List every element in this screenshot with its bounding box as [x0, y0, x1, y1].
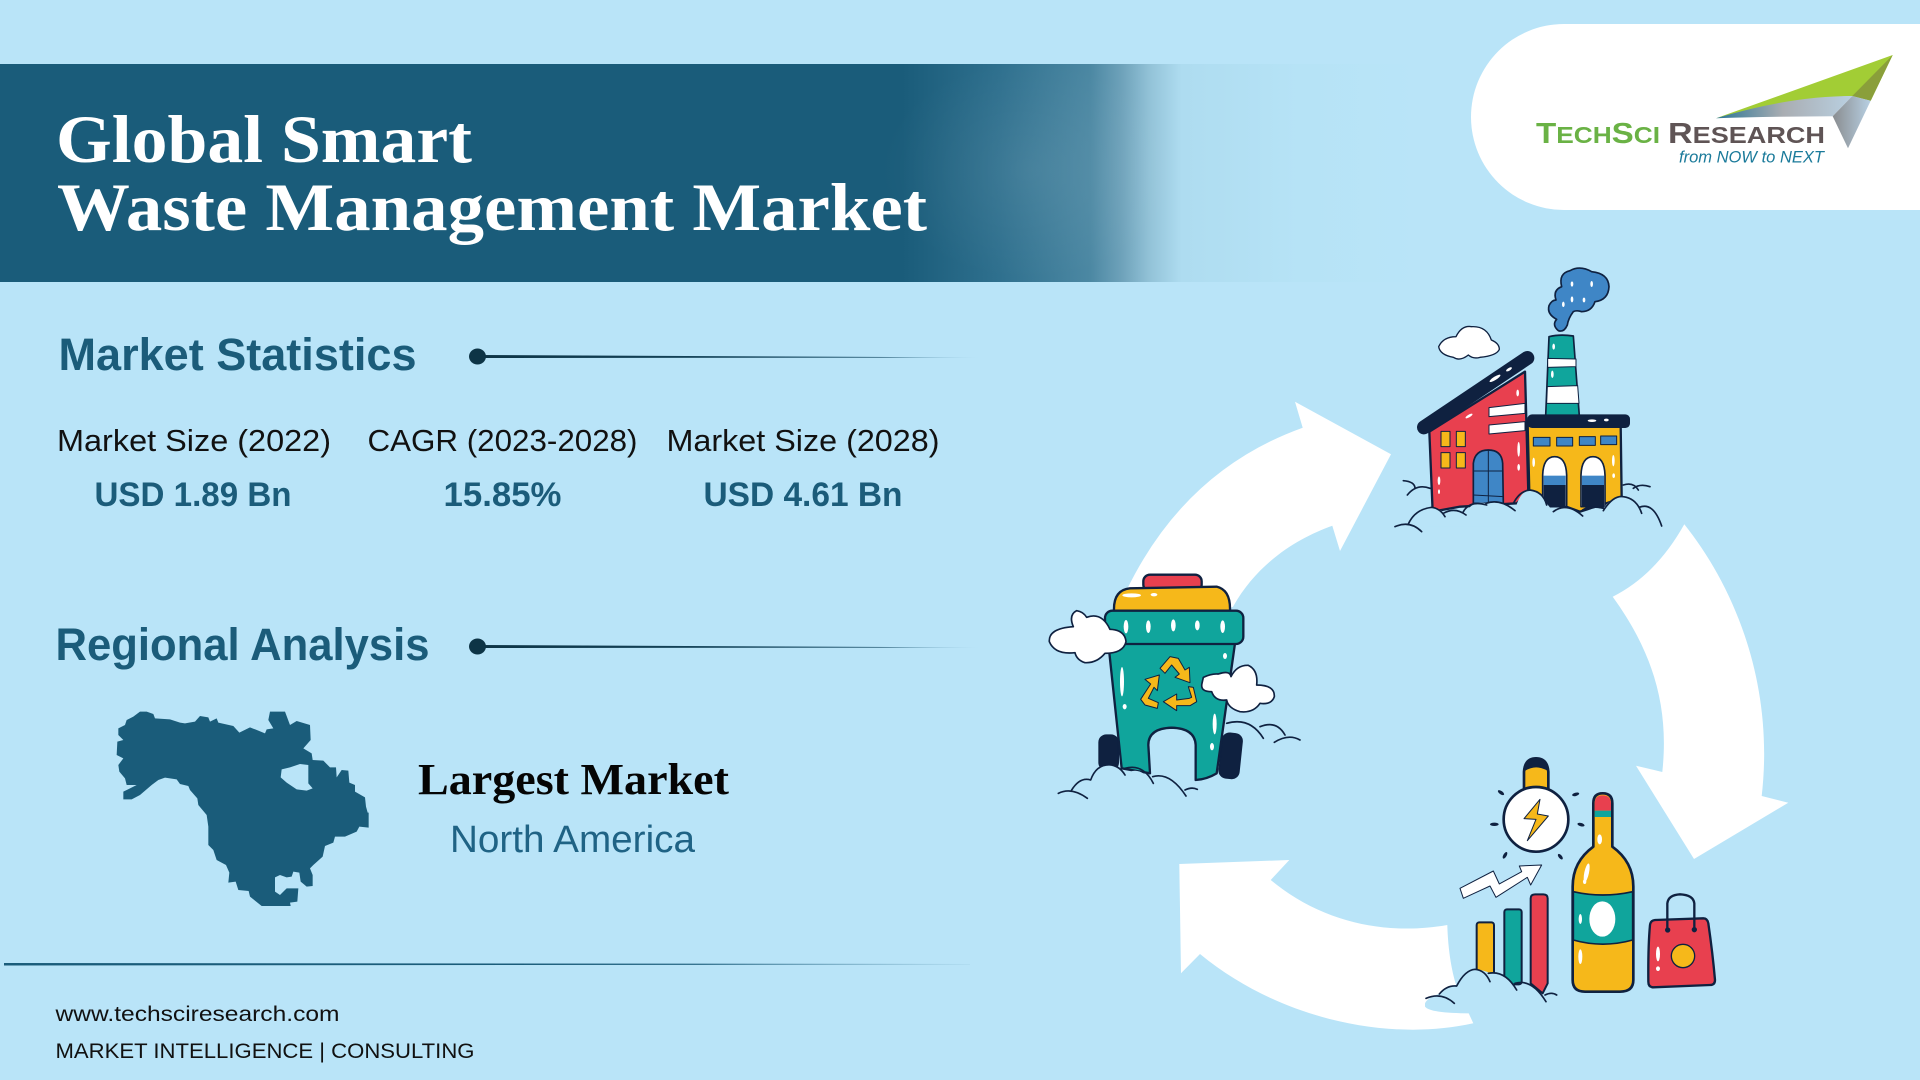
stat: market size 2028: USD 4.61 Bn	[704, 476, 902, 514]
factory ground clouds	[1395, 481, 1662, 532]
title: Global Smart	[56, 101, 472, 177]
bin handle	[1143, 575, 1202, 591]
products ground cloud	[1425, 969, 1557, 1013]
chimney	[1546, 335, 1579, 416]
title banner	[0, 64, 1420, 282]
bulb rays	[1490, 789, 1585, 860]
label: largest market: Largest Market	[418, 755, 729, 804]
logo wordmark: RESEARCH	[1668, 118, 1825, 150]
bar: yellow	[1477, 922, 1494, 979]
smoke cloud	[1549, 268, 1609, 331]
bin right cloud	[1202, 665, 1274, 712]
logo tagline: from NOW to NEXT	[1679, 148, 1826, 166]
recycle symbol	[1141, 657, 1197, 711]
lightning bolt	[1524, 799, 1548, 841]
stat: cagr	[368, 423, 638, 514]
stat: market size 2022: Market Size (2022)	[57, 423, 331, 458]
factory blue windows	[1533, 436, 1617, 446]
logo mark	[1716, 55, 1893, 148]
smoke highlights	[1562, 281, 1593, 307]
factory highlights	[1438, 390, 1615, 494]
bin ground clouds	[1058, 722, 1300, 800]
bar: red	[1531, 894, 1548, 993]
white cloud	[1439, 326, 1499, 359]
stat: market size 2022: USD 1.89 Bn	[94, 476, 292, 514]
factory arches	[1543, 457, 1605, 507]
stat: cagr: CAGR (2023-2028)	[368, 423, 638, 458]
heading: market statistics: Market Statistics	[58, 329, 416, 380]
heading rule: regional analysis	[469, 638, 980, 654]
bulb socket	[1524, 758, 1548, 790]
sloped roof	[1424, 358, 1527, 427]
flat roof	[1527, 414, 1630, 428]
arrow: bin to factory	[1127, 402, 1391, 630]
bar: teal	[1504, 909, 1522, 984]
stat: market size 2022	[57, 423, 331, 514]
bin rim	[1105, 611, 1243, 644]
illustration: factory	[1395, 268, 1662, 532]
red building	[1429, 372, 1528, 512]
label: north america: North America	[450, 819, 696, 861]
factory wall bars	[1489, 403, 1525, 434]
title	[56, 101, 927, 245]
title: Waste Management Market	[57, 169, 927, 245]
factory door	[1473, 450, 1503, 503]
bin highlights	[1120, 593, 1227, 750]
stat: cagr: 15.85%	[444, 476, 562, 514]
factory windows	[1441, 431, 1465, 468]
heading: regional analysis: Regional Analysis	[56, 619, 430, 670]
map: north america	[117, 712, 369, 906]
bin body	[1108, 643, 1235, 780]
growth arrow	[1460, 865, 1542, 898]
arrow: products to bin	[1179, 860, 1473, 1030]
yellow building	[1528, 425, 1622, 512]
illustration: recycling bin	[1049, 575, 1300, 800]
bottle	[1573, 793, 1633, 992]
bin left cloud	[1049, 611, 1126, 663]
logo wordmark	[1536, 118, 1825, 150]
logo wordmark: TECHSCI	[1536, 118, 1660, 150]
footer: website: www.techsciresearch.com	[54, 1003, 339, 1026]
stat: market size 2028: Market Size (2028)	[666, 423, 940, 458]
arrow: factory to products	[1613, 524, 1788, 859]
bin lid	[1114, 587, 1230, 611]
footer: tagline: MARKET INTELLIGENCE | CONSULTING	[56, 1040, 474, 1063]
shopping bag	[1648, 894, 1715, 987]
stat: market size 2028	[666, 423, 940, 514]
bulb	[1504, 787, 1568, 852]
logo panel	[1471, 24, 1920, 210]
illustration: products	[1425, 758, 1715, 1013]
bulb cap	[1525, 759, 1547, 771]
heading rule: market statistics	[469, 348, 980, 364]
bin wheels	[1099, 732, 1243, 779]
